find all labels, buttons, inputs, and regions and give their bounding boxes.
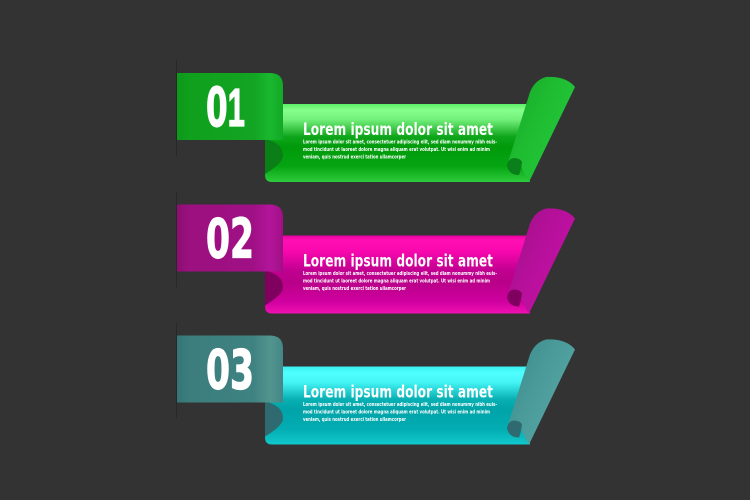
body text: veniam, quis nostrud exerci tation ullamcorper	[303, 417, 406, 423]
number: 03	[206, 338, 254, 402]
main band	[265, 366, 530, 444]
body text	[303, 140, 497, 160]
left edge shadow	[176, 322, 177, 418]
fold	[265, 139, 283, 174]
number: 02	[206, 208, 254, 270]
scroll roll	[507, 339, 575, 444]
body text: mod tincidunt ut laoreet dolore magna aliquam erat volutpat. Ut wisi enim ad minim	[303, 410, 490, 416]
left edge shadow	[176, 192, 177, 288]
scroll roll	[507, 77, 575, 182]
heading: Lorem ipsum dolor sit amet	[303, 252, 493, 272]
roll hole	[507, 290, 522, 306]
body text	[303, 402, 497, 423]
body text: Lorem ipsum dolor sit amet, consectetuer adipiscing elit, sed diam nonummy nibh euis-	[303, 140, 497, 146]
heading: Lorem ipsum dolor sit amet	[303, 382, 493, 402]
body text: mod tincidunt ut laoreet dolore magna aliquam erat volutpat. Ut wisi enim ad minim	[303, 147, 490, 153]
number tab	[177, 204, 283, 272]
number tab	[177, 336, 283, 402]
fold	[265, 402, 283, 436]
main band	[265, 104, 530, 182]
heading: Lorem ipsum dolor sit amet	[303, 120, 493, 140]
body text: veniam, quis nostrud exerci tation ullamcorper	[303, 286, 406, 292]
panel: ribbon 02	[176, 192, 575, 314]
main band	[265, 236, 530, 314]
panel: ribbon 03	[176, 322, 575, 444]
left edge shadow	[176, 60, 177, 156]
body text: veniam, quis nostrud exerci tation ullamcorper	[303, 154, 406, 160]
body text: Lorem ipsum dolor sit amet, consectetuer adipiscing elit, sed diam nonummy nibh euis-	[303, 271, 497, 277]
roll hole	[507, 158, 522, 175]
scroll roll	[507, 208, 575, 314]
body text	[303, 271, 497, 292]
number: 01	[206, 76, 245, 139]
fold	[265, 270, 283, 306]
roll hole	[507, 420, 522, 438]
body text: mod tincidunt ut laoreet dolore magna aliquam erat volutpat. Ut wisi enim ad minim	[303, 278, 490, 284]
number tab	[177, 73, 283, 140]
body text: Lorem ipsum dolor sit amet, consectetuer adipiscing elit, sed diam nonummy nibh euis-	[303, 402, 497, 408]
panel: ribbon 01	[176, 60, 575, 182]
